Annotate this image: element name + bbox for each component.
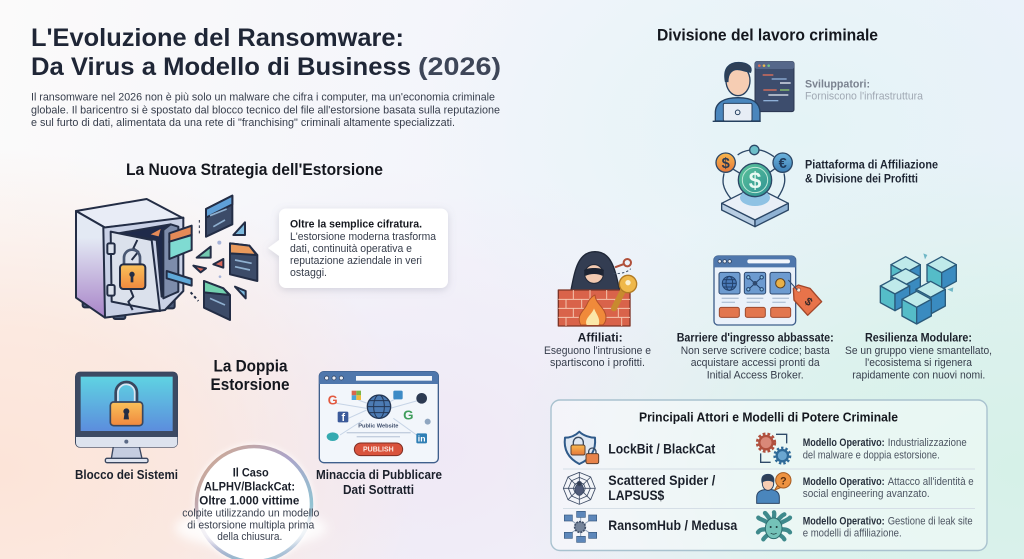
text: affiliati: Eseguono l'intrusione e xyxy=(544,345,651,357)
text: barriere d'ingresso: Non serve scrivere codice; basta xyxy=(681,345,831,357)
text: ransomhub: RansomHub / Medusa xyxy=(608,517,737,533)
icon: developer at laptop xyxy=(713,62,794,121)
icon: public website browser: f xyxy=(342,412,346,424)
text: modello operativo 2: Modello Operativo: xyxy=(803,476,885,488)
icon: public website browser: G xyxy=(403,407,414,422)
text: resilienza modulare xyxy=(845,332,992,381)
text: affiliati xyxy=(544,332,651,369)
text: sviluppatori: Sviluppatori: xyxy=(805,78,870,90)
callout: oltre la semplice cifratura: ostaggi. xyxy=(290,267,327,279)
label: blocco dei sistemi: Blocco dei Sistemi xyxy=(75,468,178,482)
text: modello operativo 3: Gestione di leak site xyxy=(888,515,973,527)
callout: il caso alphv blackcat: Oltre 1.000 vittime xyxy=(199,493,299,507)
label: minaccia di pubblicare: Dati Sottratti xyxy=(343,483,414,497)
callout: il caso alphv blackcat: colpite utilizzando un modello xyxy=(182,508,319,520)
title: (2026) xyxy=(418,53,501,81)
panel: principali attori xyxy=(551,400,987,550)
icon: profit sharing platform: $ xyxy=(749,167,762,193)
icon: gears cycle xyxy=(757,434,790,463)
text: lockbit: LockBit / BlackCat xyxy=(608,440,716,456)
text: scattered spider xyxy=(608,472,715,503)
callout: il caso alphv blackcat: della chiusura. xyxy=(217,531,282,543)
label: minaccia di pubblicare xyxy=(316,468,442,497)
intro paragraph: Il ransomware nel 2026 non è più solo un malware che cifra i computer, ma un'economia criminale xyxy=(31,92,495,104)
icon: marketplace window with price tag: $ xyxy=(802,296,815,309)
icon: network hub xyxy=(564,511,597,542)
title: Da Virus a Modello di Business xyxy=(31,53,411,81)
text: barriere d'ingresso: Initial Access Broker. xyxy=(707,369,804,381)
text: scattered spider: LAPSUS$ xyxy=(608,487,664,503)
icon: shield with padlocks xyxy=(565,432,599,464)
icon: marketplace window with price tag xyxy=(714,256,822,325)
callout: il caso alphv blackcat: di estorsione multipla prima xyxy=(187,519,315,531)
text: resilienza modulare: rapidamente con nuovi nomi. xyxy=(852,369,985,381)
icon: public website browser: PUBLISH xyxy=(363,447,394,454)
callout: oltre la semplice cifratura: dati, continuità operativa e xyxy=(290,243,412,255)
intro paragraph: e sul furto di dati, alimentata da una rete di "franchising" criminali altamente specializzati. xyxy=(31,117,455,129)
text: piattaforma di affiliazione xyxy=(805,159,939,185)
text: piattaforma di affiliazione: Piattaforma di Affiliazione xyxy=(805,159,939,172)
icon: public website browser xyxy=(319,372,438,463)
intro paragraph xyxy=(31,92,500,129)
text: resilienza modulare: Resilienza Modulare: xyxy=(865,332,972,345)
heading: divisione del lavoro criminale: Divisione del lavoro criminale xyxy=(657,27,878,45)
text: barriere d'ingresso: Barriere d'ingresso abbassate: xyxy=(677,332,834,345)
text: resilienza modulare: Se un gruppo viene smantellato, xyxy=(845,345,992,357)
intro paragraph: globale. Il baricentro si è spostato dal blocco tecnico del file all'estorsione basata sulla reputazione xyxy=(31,104,500,116)
text: barriere d'ingresso xyxy=(677,332,834,381)
text: affiliati: spartiscono i profitti. xyxy=(550,357,645,369)
heading: la doppia estorsione xyxy=(210,358,290,394)
callout: oltre la semplice cifratura: reputazione aziendale in veri xyxy=(290,255,422,267)
icon: modular cubes xyxy=(880,253,956,324)
text: modello operativo 1: del malware e doppia estorsione. xyxy=(803,449,940,461)
callout: oltre la semplice cifratura xyxy=(268,208,448,288)
icon: person with question bubble xyxy=(757,473,791,503)
icon: locked monitor xyxy=(76,372,177,463)
callout: oltre la semplice cifratura: L'estorsione moderna trasforma xyxy=(290,231,437,243)
icon: broken safe with flying files xyxy=(76,196,257,320)
text: affiliati: Affiliati: xyxy=(578,332,623,345)
text: barriere d'ingresso: acquistare accessi pronti da xyxy=(691,357,821,369)
icon: public website browser: in xyxy=(418,433,426,443)
heading: la doppia estorsione: Estorsione xyxy=(210,376,290,394)
icon: public website browser: Public Website xyxy=(358,423,398,429)
heading: la nuova strategia: La Nuova Strategia dell'Estorsione xyxy=(126,161,383,179)
panel heading: Principali Attori e Modelli di Potere Criminale xyxy=(639,410,898,425)
text: modello operativo 1: Modello Operativo: xyxy=(803,437,885,449)
text: modello operativo 1 xyxy=(803,437,967,461)
text: modello operativo 2 xyxy=(803,476,974,500)
text: resilienza modulare: l'ecosistema si rigenera xyxy=(865,357,973,369)
heading: la doppia estorsione: La Doppia xyxy=(214,358,288,376)
text: modello operativo 3: Modello Operativo: xyxy=(803,515,885,527)
title: L'Evoluzione del Ransomware: xyxy=(31,24,404,52)
text: modello operativo 1: Industrializzazione xyxy=(888,437,967,449)
callout: oltre la semplice cifratura: Oltre la semplice cifratura. xyxy=(290,218,422,230)
text: piattaforma di affiliazione: & Divisione dei Profitti xyxy=(805,172,918,185)
callout: il caso alphv blackcat xyxy=(175,444,327,559)
text: sviluppatori: Forniscono l'infrastruttura xyxy=(805,90,924,102)
text: scattered spider: Scattered Spider / xyxy=(608,472,715,488)
text: modello operativo 3 xyxy=(803,515,973,540)
icon: profit sharing platform xyxy=(716,145,792,227)
icon: medusa head xyxy=(758,512,790,539)
callout: il caso alphv blackcat: ALPHV/BlackCat: xyxy=(204,480,295,494)
icon: spider web xyxy=(563,472,595,504)
text: modello operativo 2: social engineering avanzato. xyxy=(803,488,930,500)
icon: person with question bubble: ? xyxy=(780,475,787,487)
callout: il caso alphv blackcat: Il Caso xyxy=(233,466,269,480)
text: sviluppatori xyxy=(805,78,924,102)
icon: profit sharing platform: $ xyxy=(722,156,730,172)
label: minaccia di pubblicare: Minaccia di Pubblicare xyxy=(316,468,442,482)
text: modello operativo 2: Attacco all'identità e xyxy=(888,476,974,488)
text: modello operativo 3: e modelli di affiliazione. xyxy=(803,528,902,540)
icon: hooded hacker behind firewall xyxy=(558,252,637,326)
icon: public website browser: G xyxy=(328,394,338,408)
title xyxy=(31,24,501,81)
icon: profit sharing platform: € xyxy=(779,156,787,172)
